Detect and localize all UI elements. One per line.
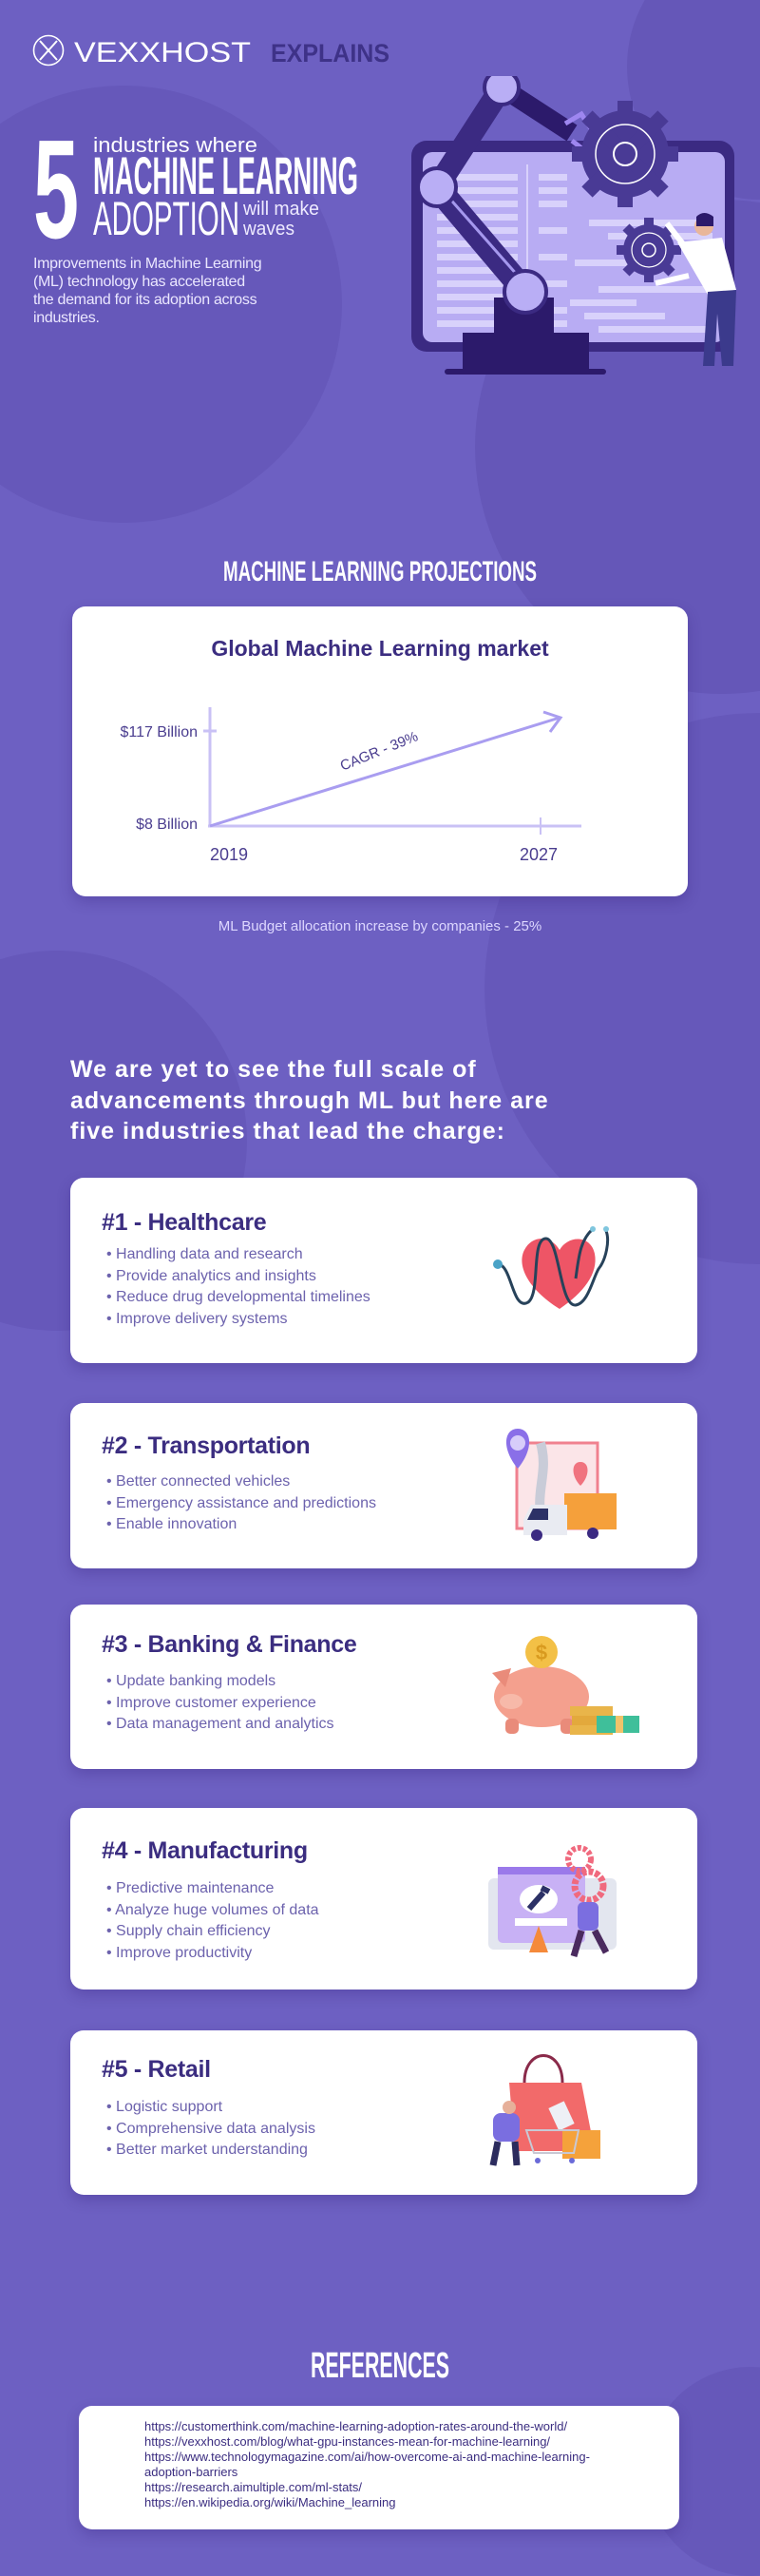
panel: retail: Better market understanding	[116, 2142, 308, 2158]
panel: healthcare: Provide analytics and insights	[116, 1268, 316, 1283]
icon: shopping bag and cart	[490, 2054, 600, 2166]
panel: manufacturing: #4 - Manufacturing	[102, 1837, 308, 1864]
references card: https://customerthink.com/machine-learning-adoption-rates-around-the-world/	[144, 2419, 567, 2433]
panel: retail: Comprehensive data analysis	[116, 2120, 315, 2137]
panel: healthcare: Improve delivery systems	[116, 1310, 288, 1327]
budget note: ML Budget allocation increase by companies - 25%	[218, 918, 542, 934]
hero paragraph	[33, 256, 261, 326]
hero title	[33, 133, 358, 242]
panel: manufacturing: Analyze huge volumes of data	[115, 1901, 319, 1918]
logo: VEXXHOST	[74, 37, 251, 68]
panel: transportation: Better connected vehicles	[116, 1473, 290, 1490]
hero title: will make	[242, 199, 319, 220]
chart card: global ML market	[72, 606, 688, 896]
chart card: global ML market: CAGR - 39%	[338, 728, 421, 775]
icon: heart with stethoscope	[493, 1226, 610, 1309]
intro text: advancements through ML but here are	[70, 1087, 549, 1114]
panel: banking & finance: Improve customer experience	[116, 1694, 316, 1711]
panel: manufacturing	[70, 1808, 697, 1990]
panel: healthcare: Handling data and research	[116, 1246, 303, 1262]
panel: healthcare	[70, 1178, 697, 1363]
chart card: global ML market: 2019	[210, 845, 248, 864]
panel: retail: Logistic support	[116, 2099, 222, 2115]
intro text: We are yet to see the full scale of	[70, 1056, 477, 1083]
chart card: global ML market: $8 Billion	[136, 817, 198, 833]
hero paragraph: the demand for its adoption across	[33, 292, 256, 308]
panel: retail: #5 - Retail	[102, 2056, 211, 2083]
logo	[32, 34, 390, 68]
chart card: global ML market: 2027	[520, 845, 558, 864]
hero paragraph: Improvements in Machine Learning	[33, 256, 261, 272]
hero title: industries where	[93, 133, 257, 157]
references card: https://vexxhost.com/blog/what-gpu-instances-mean-for-machine-learning/	[144, 2434, 550, 2449]
icon: maintenance screen with gears	[488, 1845, 617, 1957]
panel: manufacturing: Supply chain efficiency	[116, 1923, 271, 1939]
icon: map and truck	[505, 1429, 617, 1541]
chart title: Global Machine Learning market	[211, 636, 549, 661]
panel: banking & finance: #3 - Banking & Finance	[102, 1631, 356, 1658]
hero paragraph: industries.	[33, 310, 100, 326]
panel: manufacturing: Improve productivity	[116, 1945, 252, 1960]
panel: transportation: #2 - Transportation	[102, 1432, 310, 1459]
intro text: five industries that lead the charge:	[70, 1118, 505, 1144]
icon: piggy bank: $	[536, 1641, 547, 1664]
panel: transportation	[70, 1403, 697, 1568]
panel: banking & finance	[70, 1605, 697, 1769]
references card: https://www.technologymagazine.com/ai/how-overcome-ai-and-machine-learning-adoption-barriers	[144, 2450, 590, 2479]
chart card: global ML market: $117 Billion	[120, 724, 198, 740]
icon: piggy bank	[492, 1636, 639, 1735]
hero title: waves	[242, 219, 294, 240]
panel: transportation: Emergency assistance and predictions	[116, 1494, 376, 1511]
hero paragraph: (ML) technology has accelerated	[33, 274, 245, 290]
references card: https://en.wikipedia.org/wiki/Machine_learning	[144, 2495, 395, 2509]
panel: manufacturing: Predictive maintenance	[116, 1880, 274, 1896]
intro text	[70, 1056, 549, 1144]
panel: retail	[70, 2030, 697, 2195]
panel: banking & finance: Update banking models	[116, 1673, 276, 1689]
panel: healthcare: #1 - Healthcare	[102, 1209, 266, 1236]
panel: healthcare: Reduce drug developmental timelines	[116, 1289, 370, 1305]
references card	[79, 2406, 679, 2529]
panel: banking & finance: Data management and analytics	[116, 1716, 334, 1732]
illustration: robot arm and monitor	[411, 76, 736, 375]
references card: https://research.aimultiple.com/ml-stats/	[144, 2480, 362, 2494]
panel: transportation: Enable innovation	[116, 1516, 237, 1532]
